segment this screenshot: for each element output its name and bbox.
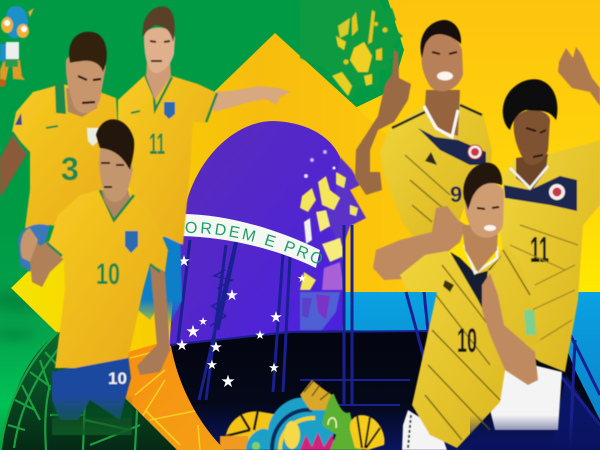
Silva crest [87, 128, 99, 146]
constellation stars: ★ [220, 372, 236, 392]
Cuadrado chest panel [504, 176, 577, 211]
James hair [463, 163, 502, 210]
player: Cuadrado number 11 Colombia [490, 47, 600, 430]
Cuadrado neck [516, 154, 548, 190]
Cuadrado jersey [500, 140, 600, 372]
Silva neck [66, 88, 98, 117]
Silva arm [0, 133, 28, 195]
constellation stars: ★ [209, 338, 223, 356]
Teo face [421, 34, 463, 91]
Neymar number: 10 [96, 258, 120, 291]
player: Cuadrado number 11 Colombia: 11 [530, 229, 549, 270]
background: black stadium area [170, 330, 600, 450]
Oscar hair [143, 6, 175, 42]
constellation stars: ★ [269, 308, 283, 326]
Cuadrado shorts [490, 358, 562, 430]
Neymar hair [96, 119, 134, 170]
Oscar legs [132, 230, 182, 330]
constellation stars: ★ [177, 252, 191, 270]
orange stadium truss lines [130, 348, 200, 450]
background: Colombian blue band [300, 292, 600, 432]
constellation stars: ★ [297, 272, 307, 285]
dark green stadium arch lower-left [2, 332, 177, 450]
Oscar jersey [118, 75, 217, 245]
Neymar shorts [52, 355, 131, 420]
constellation stars: ★ [225, 286, 239, 304]
constellation stars: ★ [185, 322, 201, 342]
Oscar face [144, 28, 175, 73]
Oscar crest [164, 102, 175, 119]
Neymar legs fade into truss [52, 395, 132, 435]
logo blue swirl [246, 398, 336, 450]
constellation stars: ★ [206, 358, 218, 373]
Cuadrado raised hand [558, 47, 600, 106]
James number: 10 [457, 322, 477, 360]
Silva jersey [12, 84, 132, 235]
background: green cloud texture [0, 288, 48, 341]
Silva elbow sleeve white [18, 224, 50, 272]
Neymar right arm [137, 265, 170, 375]
Neymar crest [125, 231, 138, 253]
player: Thiago Silva number 3 Brazil [0, 32, 132, 272]
background: yellow field of Colombian flag [330, 0, 600, 295]
Teo number: 9 [450, 182, 462, 207]
James face [465, 183, 504, 238]
logo fan rays [300, 380, 332, 410]
flag banner: ORDEM E PROGRESSO: ORDEM E PRO [186, 222, 322, 264]
Oscar neck [146, 60, 171, 100]
James white shorts [402, 410, 447, 450]
Silva hair [69, 32, 107, 72]
Oscar number: 11 [149, 128, 165, 161]
constellation stars: ★ [255, 328, 265, 342]
Cuadrado hair [503, 79, 557, 130]
James sleeve patch [524, 310, 536, 335]
constellation stars [175, 252, 307, 392]
FIFA World Cup 2014 logo artwork [220, 378, 384, 450]
player: Teofilo Gutierrez number 9 Colombia [355, 20, 492, 245]
Neymar face [99, 146, 133, 202]
player: James Rodriguez number 10 Colombia [373, 163, 540, 450]
logo green leaf [322, 394, 368, 450]
constellation stars: ★ [268, 361, 280, 376]
James raised arm [373, 206, 466, 280]
constellation stars: ★ [198, 315, 208, 328]
Cuadrado face [514, 110, 550, 165]
player: Oscar number 11 Brazil [118, 6, 291, 330]
James jersey [400, 245, 540, 448]
purple globe [170, 121, 345, 345]
player: Neymar number 10 Brazil [20, 119, 170, 435]
Teo chest panel [418, 128, 486, 165]
logo right sun [350, 415, 384, 450]
Oscar arm [208, 86, 291, 112]
background: green splatter at top [300, 0, 403, 100]
James right forearm hand [482, 273, 538, 385]
Neymar jersey [48, 188, 168, 368]
logo left sun [225, 411, 280, 450]
Silva face [66, 56, 106, 113]
Neymar left arm and hand [24, 236, 65, 287]
orange stadium segment [125, 340, 225, 450]
mascot Fuleco [0, 6, 34, 87]
James jersey stripes [425, 250, 530, 440]
Teo jersey [380, 103, 492, 245]
James neck [462, 225, 498, 272]
player: Neymar number 10 Brazil: 10 [108, 369, 127, 388]
Teo hair [421, 20, 461, 58]
navy lower right corner [550, 375, 600, 450]
stadium trusses [170, 225, 600, 450]
logo magenta flower [300, 432, 336, 450]
Teo neck [425, 90, 460, 136]
Teo raised arm [355, 50, 411, 195]
purple and yellow splatter on globe edge [300, 150, 366, 330]
Silva number: 3 [61, 151, 79, 187]
navy fade at bottom right [470, 415, 600, 450]
background: Brazilian flag diamond [11, 33, 420, 450]
Neymar neck [102, 190, 130, 218]
constellation stars: ★ [175, 336, 189, 354]
James collar and black panel [450, 252, 503, 308]
